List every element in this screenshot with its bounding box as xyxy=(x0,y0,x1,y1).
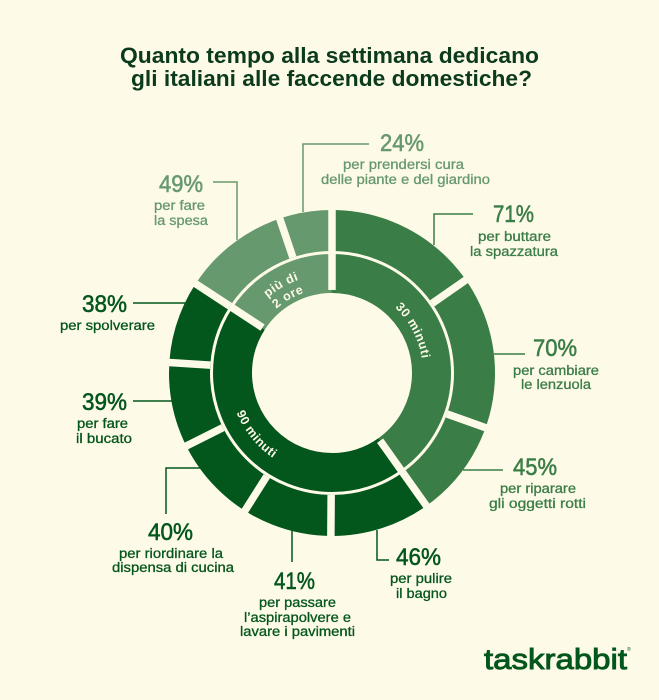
callout: 24%: delle piante e del giardino xyxy=(321,172,490,187)
callout: 49%: per fare xyxy=(154,198,205,213)
title xyxy=(120,43,539,91)
callout: 45%: per riparare xyxy=(500,481,576,496)
ring label: più di 2 ore xyxy=(264,272,303,308)
callout: 49% xyxy=(154,171,237,240)
callout: 71%: la spazzatura xyxy=(470,244,559,259)
inner ring: time bands xyxy=(230,251,432,472)
title: Quanto tempo alla settimana dedicano xyxy=(120,43,539,68)
callout: 41%: lavare i pavimenti xyxy=(240,624,355,639)
callout: 24%: 24% xyxy=(380,130,424,157)
callout: 46%: il bagno xyxy=(396,586,447,601)
donut chart xyxy=(169,210,495,536)
callout: 24%: per prendersi cura xyxy=(343,157,465,172)
callout: 70%: le lenzuola xyxy=(521,377,592,392)
callout: 41%: per passare xyxy=(259,595,336,610)
callout: 46%: per pulire xyxy=(390,571,452,586)
title: gli italiani alle faccende domestiche? xyxy=(131,66,532,91)
callout: 45% xyxy=(463,454,586,511)
callout: 41%: l’aspirapolvere e xyxy=(244,610,351,625)
callout: 71%: per buttare xyxy=(478,229,551,244)
callout: 71% xyxy=(434,201,559,259)
callout: 49%: la spesa xyxy=(154,213,209,228)
callout: 70%: 70% xyxy=(533,335,577,362)
callout: 38%: per spolverare xyxy=(60,318,155,333)
ring label: 30 minuti: 30 minuti xyxy=(396,302,431,358)
ring label: 90 minuti: 90 minuti xyxy=(237,410,278,458)
callout: 40%: dispensa di cucina xyxy=(112,560,235,575)
callout: 24% xyxy=(303,130,490,212)
callout: 46%: 46% xyxy=(396,544,441,571)
callout: 40% xyxy=(112,468,235,575)
callout: 49%: 49% xyxy=(159,171,203,198)
callout: 70%: per cambiare xyxy=(513,363,599,378)
callout: 70% xyxy=(494,335,599,392)
ring label: più di 2 ore: più di xyxy=(264,272,298,300)
callout: 71%: 71% xyxy=(493,201,534,228)
logo: taskrabbit: taskrabbit xyxy=(484,644,627,676)
outer ring: tasks xyxy=(159,200,495,546)
callout: 38% xyxy=(60,291,185,333)
callout: 46% xyxy=(377,530,452,601)
callout: 39%: il bucato xyxy=(76,431,132,446)
callout: 39%: 39% xyxy=(82,389,127,416)
callout: 45%: 45% xyxy=(513,454,557,481)
callout: 40%: 40% xyxy=(148,519,193,546)
callout: 41% xyxy=(240,530,355,639)
logo: taskrabbit: ® xyxy=(627,646,631,653)
callout: 40%: per riordinare la xyxy=(119,546,224,561)
callout: 41%: 41% xyxy=(274,568,315,595)
callout: 45%: gli oggetti rotti xyxy=(489,496,586,511)
ring label: più di 2 ore: 2 ore xyxy=(272,288,303,308)
callout: 39% xyxy=(76,389,173,446)
callout: 39%: per fare xyxy=(77,416,128,431)
callout: 38%: 38% xyxy=(82,291,127,318)
